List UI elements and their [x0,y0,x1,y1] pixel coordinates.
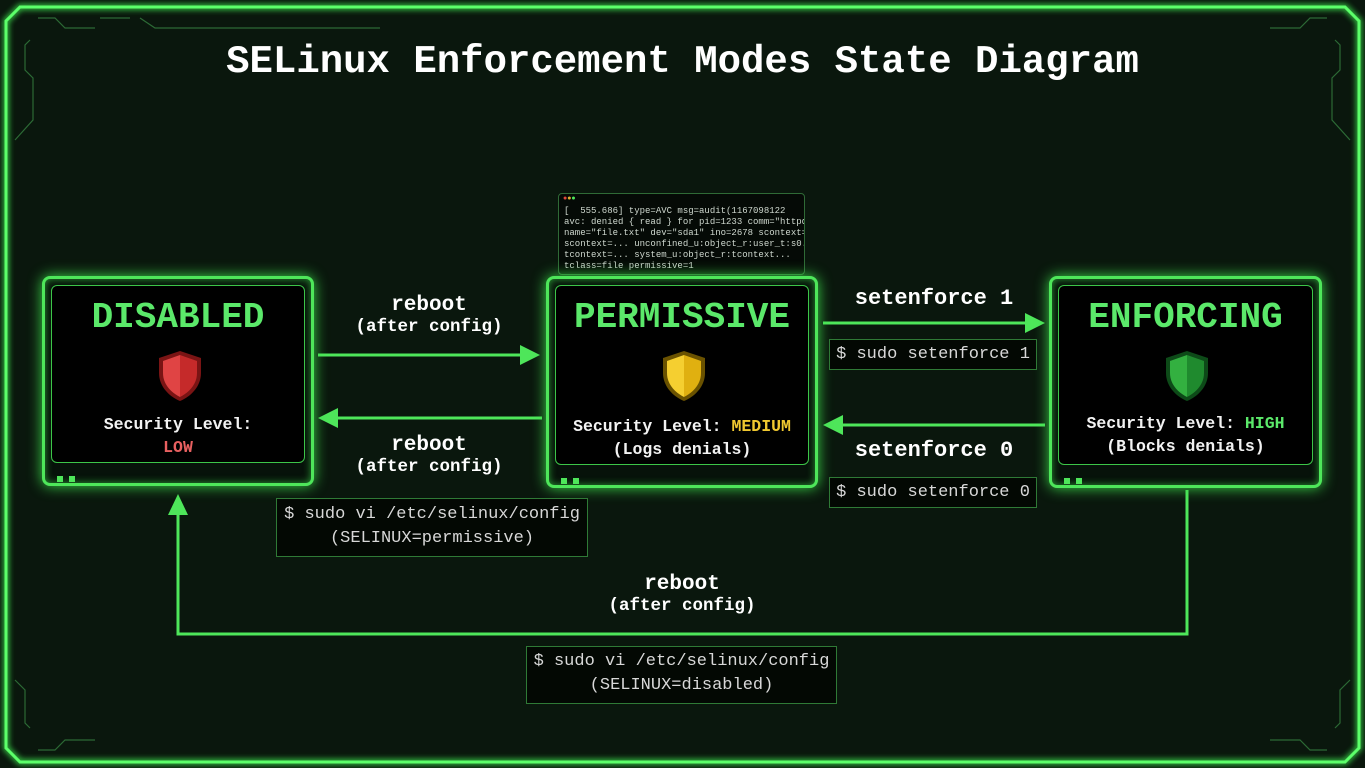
panel: disabled [42,276,314,486]
code: setenforce 1 [829,339,1037,370]
label: reboot top [355,294,503,337]
label: setenforce 0: setenforce 0 [855,438,1013,463]
terminal log window: ●●● [563,195,576,203]
code: setenforce 0: $ sudo setenforce 0 [836,483,1030,502]
code: disabled config: (SELINUX=disabled) [590,676,773,695]
security level text: Security Level: [104,415,252,434]
panel: enforcing [1049,276,1322,488]
security level text: LOW [163,438,193,457]
security level text: (Logs denials) [613,440,751,459]
arrow: reboot to disabled [318,408,542,428]
panel: permissive [546,276,818,488]
security level text: Security Level: HIGH [1086,414,1285,433]
code: permissive config: $ sudo vi /etc/selinux/config [284,505,580,524]
label: reboot top: reboot [391,294,467,317]
icon: red shield [159,351,201,401]
label: reboot bottom loop: (after config) [608,596,756,616]
code: setenforce 0 [829,477,1037,508]
code: setenforce 1: $ sudo setenforce 1 [836,345,1030,364]
code: disabled config [526,646,837,704]
code: disabled config: $ sudo vi /etc/selinux/config [534,652,829,671]
heading: enforcing: ENFORCING [1088,297,1283,338]
label: setenforce 1: setenforce 1 [855,286,1013,311]
security level text [104,415,252,457]
code: permissive config: (SELINUX=permissive) [330,529,534,548]
title: SELinux Enforcement Modes State Diagram [226,40,1139,84]
label: reboot bottom loop [608,573,756,616]
security level text: Security Level: MEDIUM [573,417,791,436]
label: reboot top: (after config) [355,317,503,337]
security level text: (Blocks denials) [1106,437,1265,456]
heading: disabled: DISABLED [92,297,264,338]
label: reboot bottom: (after config) [355,457,503,477]
arrow: setenforce 0 [823,415,1045,435]
security level text [573,417,791,459]
code: permissive config [276,498,588,557]
icon: yellow shield [663,351,705,401]
security level text [1086,414,1285,456]
arrow: setenforce 1 [823,313,1045,333]
label: reboot bottom loop: reboot [644,573,720,596]
icon: green shield [1166,351,1208,401]
label: reboot bottom [355,434,503,477]
arrow: reboot to permissive [318,345,540,365]
heading: permissive: PERMISSIVE [574,297,790,338]
arrow: enforcing to disabled loop [168,490,1187,634]
label: reboot bottom: reboot [391,434,467,457]
